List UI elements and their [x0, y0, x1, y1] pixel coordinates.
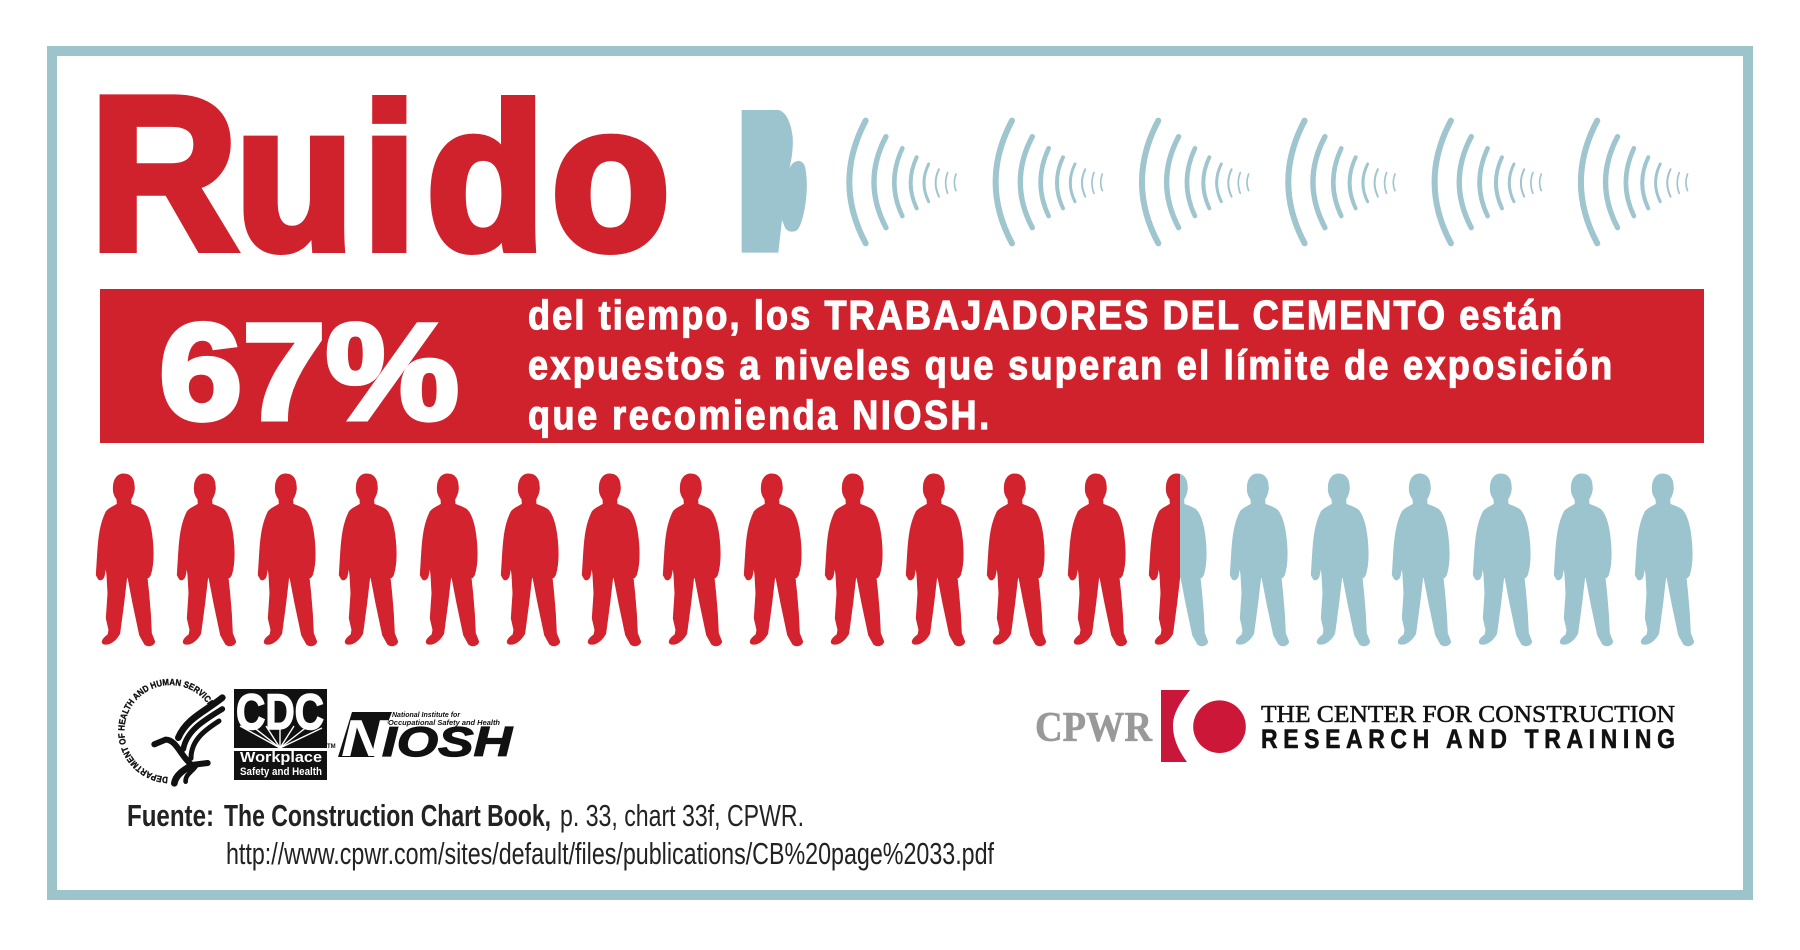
pictogram: split worker [1150, 474, 1207, 645]
icon: ear [742, 110, 807, 253]
logo: NIOSH [338, 710, 514, 768]
logo: NIOSH: National Institute for [392, 712, 461, 719]
logo: CDC Workplace Safety and Health: CDC [236, 684, 324, 740]
source citation: p. 33, chart 33f, CPWR. [560, 798, 804, 833]
logo: HHS: DEPARTMENT OF HEALTH AND HUMAN SERVICES • USA [118, 678, 213, 784]
pictogram: red workers (exposed) [97, 474, 1126, 645]
logo: CDC Workplace Safety and Health: Workplace [240, 749, 322, 766]
source citation: The Construction Chart Book, [224, 798, 551, 833]
statement text: del tiempo, los TRABAJADORES DEL CEMENTO están [528, 293, 1562, 339]
CPWR name: THE CENTER FOR CONSTRUCTION [1261, 702, 1675, 728]
source citation [127, 798, 994, 871]
pictogram: blue workers (not exposed) [1231, 474, 1693, 645]
logo: NIOSH: N [341, 710, 389, 768]
logo: CPWR [1035, 690, 1675, 762]
statement text: expuestos a niveles que superan el límite de exposición [528, 343, 1612, 389]
statistic: 67%: 67% [159, 296, 459, 449]
CPWR bracket mark [1161, 690, 1190, 762]
logo: NIOSH: IOSH [382, 718, 514, 765]
source citation: Fuente: [127, 798, 214, 833]
icon: sound waves [849, 121, 1688, 243]
title: R [90, 52, 238, 296]
logo: NIOSH: Occupational Safety and Health [388, 720, 500, 727]
CPWR circle mark [1193, 700, 1246, 753]
logo: CDC Workplace Safety and Health [234, 684, 336, 780]
logo: CDC Workplace Safety and Health: Safety and Health [240, 766, 322, 778]
source citation: http://www.cpwr.com/sites/default/files/publications/CB%20page%2033.pdf [226, 836, 994, 871]
CPWR wordmark: CPWR [1035, 705, 1153, 751]
logo: CDC Workplace Safety and Health: TM [327, 744, 336, 750]
title: uido [235, 61, 670, 293]
statement text: que recomienda NIOSH. [528, 393, 989, 439]
red statistic banner [100, 289, 1704, 449]
logo: HHS [118, 678, 226, 787]
statement text [528, 293, 1612, 439]
logo: CPWR: RESEARCH AND TRAINING [1261, 724, 1675, 754]
